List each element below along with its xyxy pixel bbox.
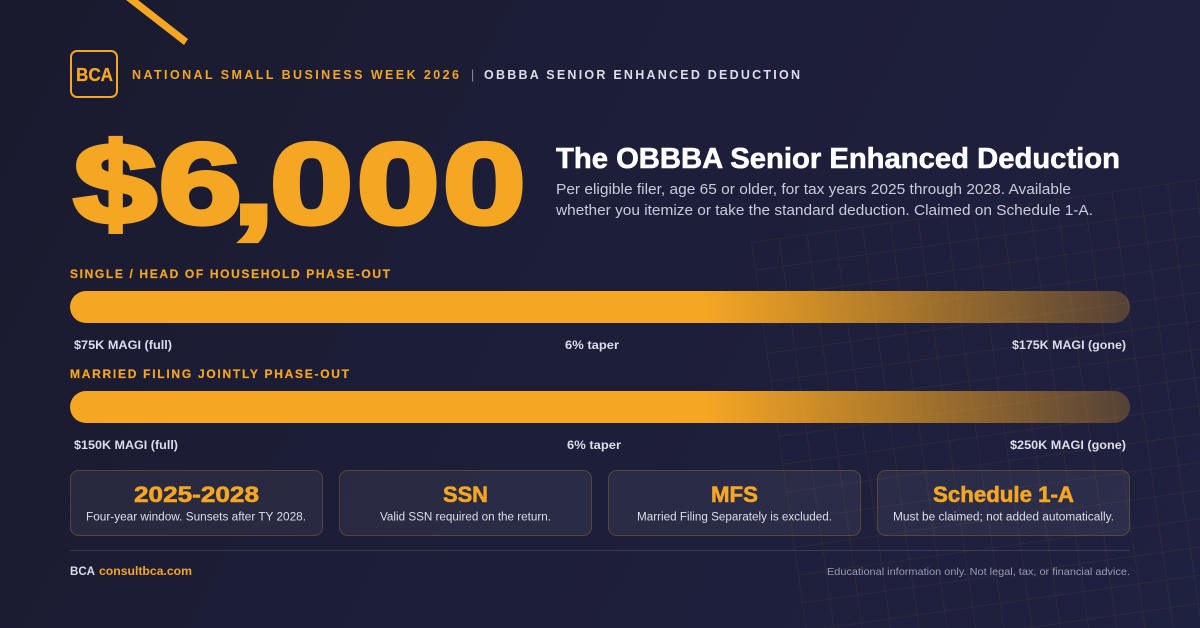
card: Schedule 1-A: Schedule 1-A — [933, 482, 1074, 507]
header eyebrow: NATIONAL SMALL BUSINESS WEEK 2026 — [132, 68, 459, 82]
bar labels: single: 6% taper — [565, 338, 619, 352]
card: SSN: SSN — [443, 482, 488, 507]
bar labels: single: $75K MAGI (full) — [74, 338, 172, 352]
description: whether you itemize or take the standard deduction. Claimed on Schedule 1-A. — [555, 202, 1093, 219]
card: Schedule 1-A — [878, 470, 1130, 536]
bar: single phase-out — [70, 291, 1130, 323]
bar: married phase-out — [70, 391, 1130, 423]
title: The OBBBA Senior Enhanced Deduction — [556, 143, 1120, 175]
logo: BCA: BCA — [76, 65, 113, 85]
card: SSN — [340, 470, 592, 536]
label: married phase-out: MARRIED FILING JOINTLY PHASE-OUT — [70, 367, 350, 381]
bar labels: married: $250K MAGI (gone) — [1010, 438, 1126, 452]
header — [71, 51, 800, 97]
card: MFS: Married Filing Separately is excluded. — [637, 512, 832, 524]
card: SSN: Valid SSN required on the return. — [380, 512, 551, 524]
bar labels: married — [74, 438, 1126, 452]
card: 2025-2028 — [70, 470, 322, 536]
card: MFS: MFS — [711, 482, 758, 507]
accent diagonal stroke — [126, 0, 188, 45]
logo: BCA — [71, 51, 117, 97]
label: single phase-out: SINGLE / HEAD OF HOUSEHOLD PHASE-OUT — [70, 267, 391, 281]
header separator: | — [471, 68, 474, 82]
bar labels: married: $150K MAGI (full) — [74, 438, 178, 452]
card: Schedule 1-A: Must be claimed; not added automatically. — [893, 512, 1114, 524]
description: Per eligible filer, age 65 or older, for tax years 2025 through 2028. Available — [556, 181, 1071, 198]
panel: married filing jointly phase-out — [70, 367, 1130, 452]
big amount: $6,000 — [74, 120, 525, 248]
header topic: OBBBA SENIOR ENHANCED DEDUCTION — [484, 68, 800, 82]
bar labels: married: 6% taper — [567, 438, 621, 452]
description — [555, 181, 1093, 219]
footer brand: BCA — [70, 564, 95, 578]
disclaimer: Educational information only. Not legal, tax, or financial advice. — [827, 566, 1130, 578]
card: 2025-2028: Four-year window. Sunsets after TY 2028. — [86, 512, 306, 524]
footer brand: consultbca.com — [99, 564, 192, 578]
bar labels: single — [74, 338, 1126, 352]
background grid pattern — [751, 179, 1200, 628]
panel: single / head of household phase-out — [70, 267, 1130, 352]
card: MFS — [608, 470, 860, 536]
bar labels: single: $175K MAGI (gone) — [1012, 338, 1126, 352]
card: 2025-2028: 2025-2028 — [134, 482, 259, 507]
